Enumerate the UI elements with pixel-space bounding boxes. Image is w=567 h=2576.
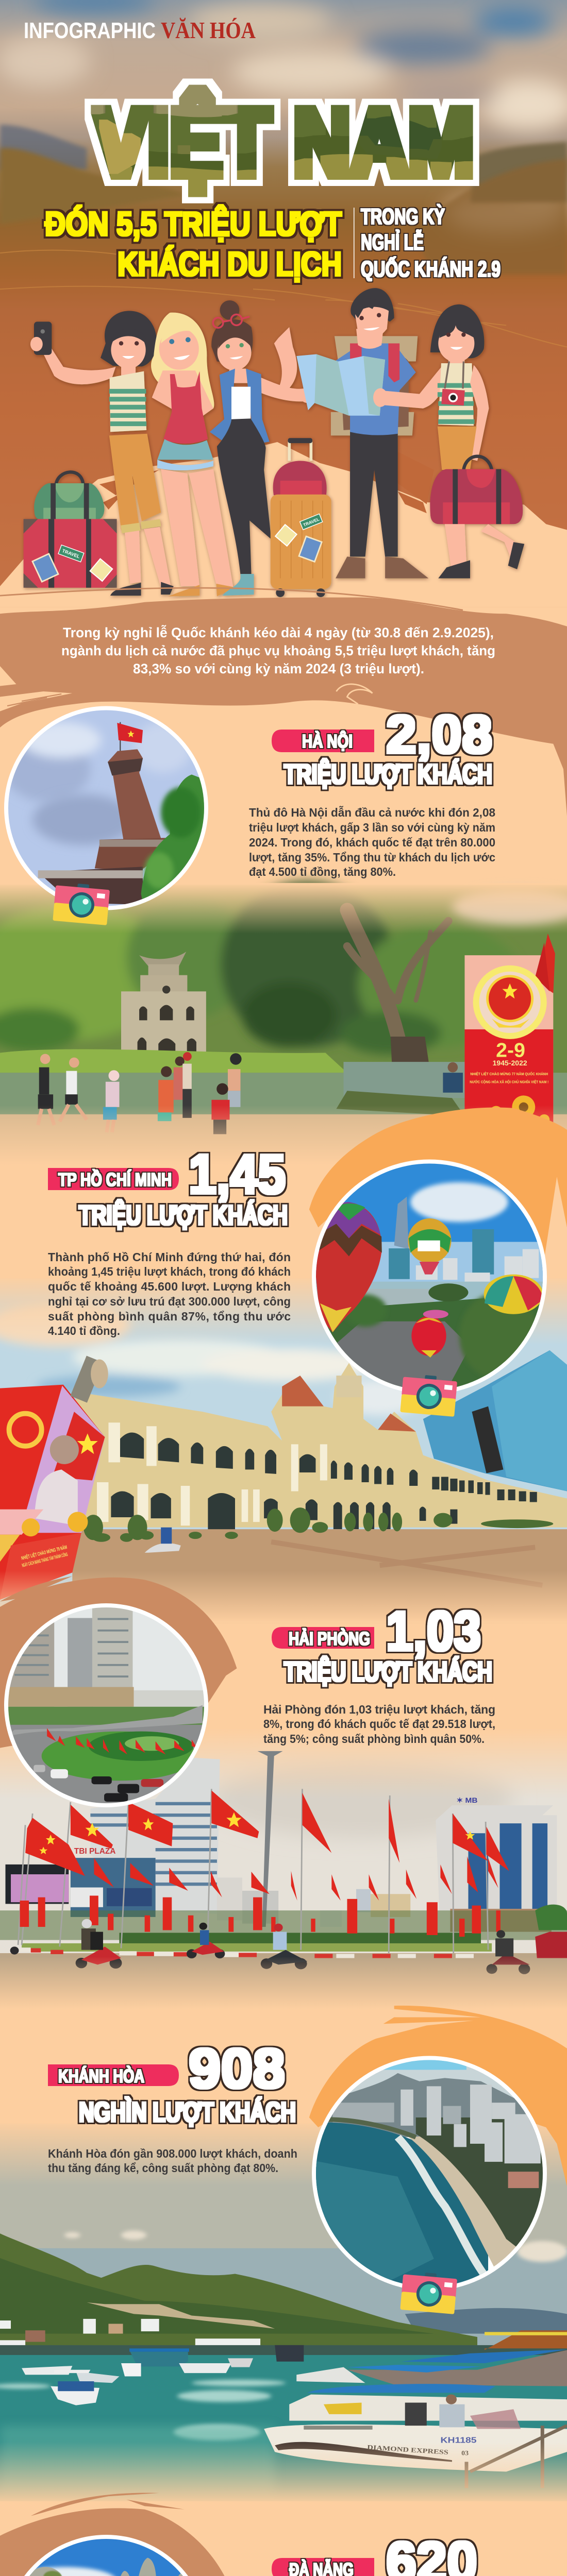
photo circle: Golden Bridge hands xyxy=(24,2535,188,2576)
sub: water xyxy=(0,2355,567,2501)
heading: TP Ho Chi Minh: 1,45 xyxy=(189,1143,286,1205)
heading: Ha Noi: TRIỆU LƯỢT KHÁCH xyxy=(284,758,492,790)
subtitle: ĐÓN 5,5 TRIỆU LƯỢT xyxy=(45,205,342,243)
sub: national day banner: NHIỆT LIỆT CHÀO MỪNG 77 NĂM QUỐC KHÁNH xyxy=(470,1071,548,1076)
sub: national day banner xyxy=(464,934,555,1134)
heading: Da Nang xyxy=(272,2530,501,2576)
heading: Hai Phong: TRIỆU LƯỢT KHÁCH xyxy=(284,1656,492,1687)
text: Ho Chi Minh: khoảng 1,45 triệu lượt khách, trong đó khách xyxy=(48,1265,291,1278)
sub: city hall xyxy=(76,1363,567,1528)
subtitle: NGHỈ LỄ xyxy=(361,229,424,255)
left luggage xyxy=(24,472,117,588)
photo: Hai Phong flag street: ✶ MB xyxy=(456,1797,478,1805)
title: VIỆT NAM: VIỆT NAM xyxy=(94,88,474,196)
left luggage: TRAVEL xyxy=(61,548,81,560)
subtitle: QUỐC KHÁNH 2.9 xyxy=(361,256,501,282)
photo circle: Ha Noi flag tower xyxy=(0,704,217,913)
sub: boats: DIAMOND EXPRESS xyxy=(367,2444,448,2456)
sub: road xyxy=(0,1953,567,2009)
text: Ha Noi: 2024. Trong đó, khách quốc tế đạt trên 80.000 xyxy=(249,836,495,849)
heading: Khanh Hoa xyxy=(48,2037,296,2128)
traveller 3 xyxy=(210,300,314,596)
sub: national day banner: 1945-2022 xyxy=(493,1059,527,1067)
heading: TP Ho Chi Minh: TRIỆU LƯỢT KHÁCH xyxy=(79,1199,288,1231)
text: Ho Chi Minh: 4.140 tỉ đồng. xyxy=(48,1324,120,1337)
sub: propaganda board: NGÀY CÁCH MẠNG THÁNG TÁM THÀNH CÔNG xyxy=(21,1551,69,1569)
brush: brown Hai Phong xyxy=(0,1576,237,1748)
icon: camera xyxy=(400,2270,458,2314)
subtitle: TRONG KỲ xyxy=(361,204,445,229)
text: Ha Noi: lượt, tăng 35%. Tổng thu từ khách du lịch ước xyxy=(249,851,495,864)
sub: poles xyxy=(18,1789,488,1953)
panel: hero landscape background xyxy=(0,0,567,607)
text: intro paragraph: ngành du lịch cả nước đã phục vụ khoảng 5,5 triệu lượt khách, tăng xyxy=(61,643,495,658)
subtitle: KHÁCH DU LỊCH xyxy=(118,245,342,283)
photo circle: Hai Phong roundabout xyxy=(0,1595,217,1807)
icon: camera xyxy=(53,882,110,925)
sub: boats: 03 xyxy=(461,2449,469,2456)
subtitle xyxy=(45,204,501,283)
text: Ha Noi: triệu lượt khách, gấp 3 lần so với cùng kỳ năm xyxy=(249,821,495,834)
text: Ho Chi Minh: nghỉ tại cơ sở lưu trú đạt 300.000 lượt, công xyxy=(48,1295,291,1308)
traveller 1 xyxy=(30,311,174,596)
photo circle: Ho Chi Minh City balloons xyxy=(311,1159,567,1394)
sub: boats xyxy=(22,2330,567,2488)
text: Hai Phong: 8%, trong đó khách quốc tế đạt 29.518 lượt, xyxy=(263,1717,495,1731)
heading: Hai Phong xyxy=(272,1600,492,1687)
traveller 2 xyxy=(151,313,235,597)
photo circle: Khanh Hoa beach xyxy=(311,2056,557,2295)
photo: Hai Phong flag street: TBI PLAZA xyxy=(74,1847,116,1856)
photo: Nha Trang harbour xyxy=(0,2120,567,2504)
traveller 5 xyxy=(430,304,524,578)
photo: Ho Chi Minh City Hall xyxy=(0,1276,567,1623)
text: Ha Noi: Thủ đô Hà Nội dẫn đầu cả nước khi đón 2,08 xyxy=(249,805,495,819)
sub: buildings xyxy=(90,1758,220,1914)
heading: Hai Phong: 1,03 xyxy=(386,1600,481,1662)
brush: orange Khanh Hoa xyxy=(309,2006,567,2187)
sub: glass tower xyxy=(423,1350,567,1492)
center luggage xyxy=(271,438,331,597)
text: Khanh Hoa: Khánh Hòa đón gần 908.000 lượt khách, doanh xyxy=(48,2147,297,2160)
text: intro paragraph: 83,3% so với cùng kỳ năm 2024 (3 triệu lượt). xyxy=(133,661,424,676)
heading: Ha Noi: 2,08 xyxy=(386,705,492,765)
heading: Hai Phong: HẢI PHÒNG xyxy=(289,1628,370,1649)
sub: greenery and curb xyxy=(0,1910,567,1940)
text: intro paragraph: Trong kỳ nghỉ lễ Quốc khánh kéo dài 4 ngày (từ 30.8 đến 2.9.2025), xyxy=(63,624,494,640)
heading: TP Ho Chi Minh: TP HỒ CHÍ MINH xyxy=(58,1168,172,1190)
text: Ho Chi Minh: quốc tế khoảng 45.600 lượt. Lượng khách xyxy=(48,1280,291,1293)
icon: camera xyxy=(400,1373,458,1417)
photo: Hai Phong flag street xyxy=(0,1730,567,2009)
text: Hai Phong: Hải Phòng đón 1,03 triệu lượt khách, tăng xyxy=(263,1703,495,1716)
sub: propaganda board: NHIỆT LIỆT CHÀO MỪNG 79 NĂM xyxy=(21,1544,68,1562)
sub: turtle tower xyxy=(121,952,206,1055)
text: Ho Chi Minh: Thành phố Hồ Chí Minh đứng thứ hai, đón xyxy=(48,1250,291,1264)
sub: red flags xyxy=(20,1790,509,1937)
header logo: VĂN HÓA xyxy=(161,17,256,43)
brush: brown Da Nang xyxy=(0,2493,237,2576)
heading: Ha Noi: HÀ NỘI xyxy=(302,730,353,752)
sub: national day banner: 2-9 xyxy=(496,1039,525,1061)
heading: Khanh Hoa: NGHÌN LƯỢT KHÁCH xyxy=(79,2097,296,2128)
text: Hai Phong xyxy=(263,1703,495,1745)
illustration: group of five travellers with luggage xyxy=(24,288,524,597)
heading: TP Ho Chi Minh xyxy=(48,1143,288,1231)
text: Khanh Hoa: thu tăng đáng kể, công suất phòng đạt 80%. xyxy=(48,2161,278,2175)
sub: boats: KH1185 xyxy=(440,2436,477,2445)
text: Khanh Hoa xyxy=(48,2147,297,2175)
sub: mountains xyxy=(0,2233,477,2357)
text: Ho Chi Minh: suất phòng bình quân 87%, tổng thu ước xyxy=(48,1310,291,1323)
header logo: INFOGRAPHIC xyxy=(24,18,156,43)
heading: Khanh Hoa: 908 xyxy=(189,2037,285,2099)
text: Hai Phong: tăng 5%; công suất phòng bình quân 50%. xyxy=(263,1732,485,1745)
text: Ha Noi: đạt 4.500 tỉ đồng, tăng 80%. xyxy=(249,865,396,878)
sub: national day banner: NƯỚC CỘNG HÒA XÃ HỘI CHỦ NGHĨA VIỆT NAM ! xyxy=(470,1079,548,1084)
text: Ho Chi Minh xyxy=(48,1250,291,1337)
heading: Khanh Hoa: KHÁNH HÒA xyxy=(58,2065,144,2087)
text: Ha Noi xyxy=(249,805,495,878)
center luggage: TRAVEL xyxy=(303,516,320,528)
traveller 4 xyxy=(296,288,448,578)
heading: Ha Noi xyxy=(272,705,492,790)
sub: walkers xyxy=(38,1052,242,1134)
sub: propaganda board xyxy=(0,1385,105,1600)
text: intro paragraph xyxy=(61,624,495,676)
header logo xyxy=(24,17,256,43)
photo: Hoan Kiem lake, Ha Noi xyxy=(0,881,567,1165)
panel: intro band xyxy=(0,588,567,816)
brush: orange HCMC xyxy=(309,1108,567,1271)
sub: motorbikes xyxy=(10,1919,567,1974)
sub: balloons xyxy=(315,1202,381,1332)
sub: plaza with shrubs xyxy=(72,1529,567,1623)
